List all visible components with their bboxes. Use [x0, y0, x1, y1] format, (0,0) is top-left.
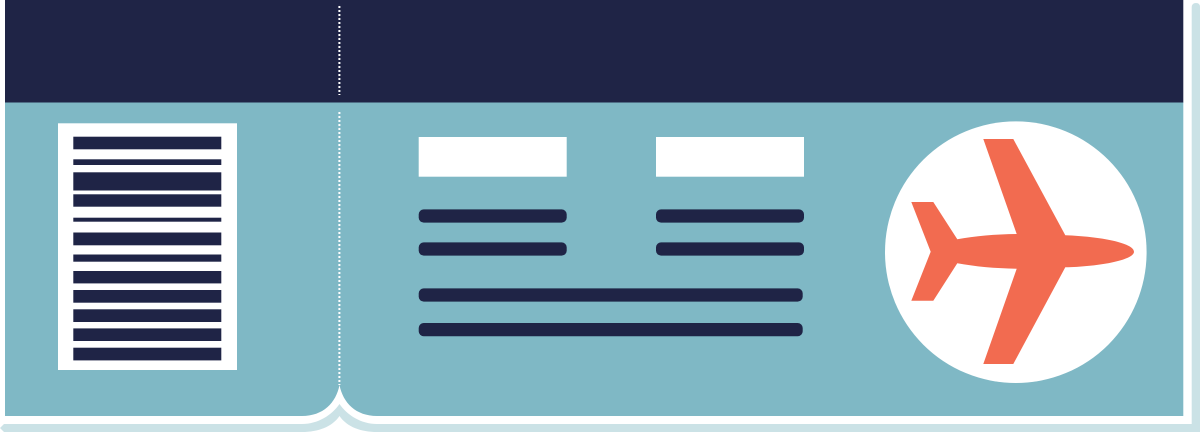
white label box: right	[656, 137, 804, 177]
white label box: left	[419, 137, 567, 177]
text placeholder lines: full width	[419, 288, 803, 336]
ticket body: teal panel	[5, 102, 1183, 416]
barcode	[58, 123, 237, 370]
ticket header: navy band	[5, 0, 1183, 102]
icon: airplane in white circle	[885, 121, 1147, 383]
text placeholder lines: left column	[419, 209, 567, 256]
text placeholder lines: right column	[656, 209, 804, 256]
tear line: header perforation	[338, 6, 340, 95]
tear line: body perforation	[338, 112, 340, 385]
